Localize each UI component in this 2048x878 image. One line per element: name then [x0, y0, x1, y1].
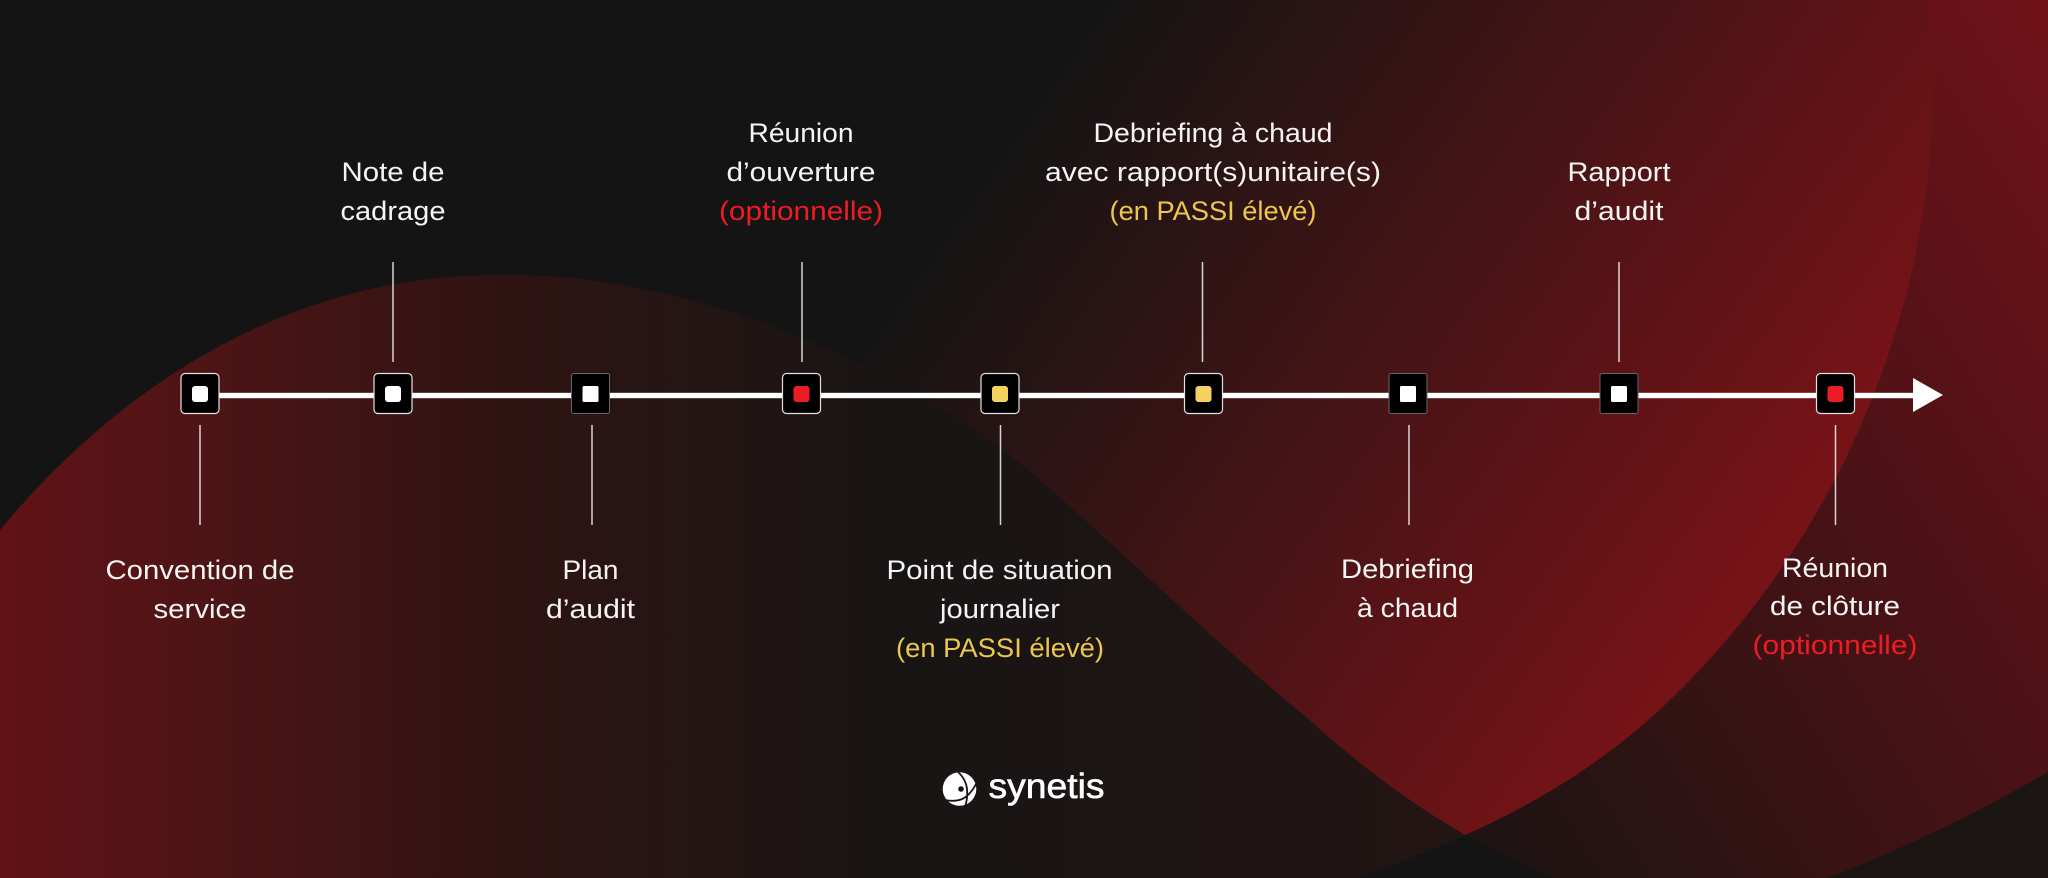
label: réunion d'ouverture [719, 118, 883, 226]
node: plan d'audit [572, 374, 610, 414]
label: plan d'audit [546, 555, 636, 624]
node: rapport d'audit [1600, 374, 1638, 414]
connector lines [200, 262, 1836, 525]
label: debriefing avec rapports: (en PASSI élevé) [1110, 196, 1316, 226]
node: debriefing à chaud [1389, 374, 1427, 414]
background shape: right red region [1356, 0, 2048, 878]
icon: synetis globe [943, 771, 976, 807]
label: debriefing à chaud: Debriefing [1341, 554, 1474, 584]
background triangle under the wave [0, 275, 1555, 878]
label: convention de service: Convention de [106, 555, 294, 585]
node: réunion d'ouverture [782, 374, 820, 414]
label: convention de service [106, 555, 294, 624]
node: convention de service [181, 374, 219, 414]
label: debriefing à chaud: à chaud [1357, 593, 1458, 623]
label: réunion d'ouverture: Réunion [748, 118, 854, 148]
label: point de situation journalier: Point de situation [886, 555, 1112, 585]
label: réunion de clôture [1752, 553, 1918, 660]
label: rapport d'audit [1568, 157, 1671, 226]
label: plan d'audit: Plan [562, 555, 618, 585]
label: debriefing avec rapports: Debriefing à chaud [1094, 118, 1332, 148]
node: debriefing avec rapports [1184, 374, 1222, 414]
label: point de situation journalier: (en PASSI élevé) [896, 633, 1104, 663]
background shape: left wave [0, 275, 1555, 878]
node: note de cadrage [374, 374, 412, 414]
label: rapport d'audit: Rapport [1568, 157, 1671, 187]
label: réunion d'ouverture: (optionnelle) [719, 196, 883, 226]
node: réunion de clôture [1816, 374, 1854, 414]
label: debriefing avec rapports [1045, 118, 1381, 226]
label: plan d'audit: d’audit [546, 594, 636, 624]
label: réunion de clôture: de clôture [1770, 591, 1900, 621]
label: convention de service: service [154, 594, 246, 624]
label: point de situation journalier: journalier [939, 594, 1060, 624]
label: debriefing avec rapports: avec rapport(s)unitaire(s) [1045, 157, 1381, 187]
label: note de cadrage [340, 157, 446, 226]
label: note de cadrage: Note de [342, 157, 444, 187]
label: réunion de clôture: Réunion [1782, 553, 1888, 583]
label: réunion d'ouverture: d’ouverture [726, 157, 876, 187]
timeline axis with arrow [200, 378, 1943, 412]
background corner: bottom right [1827, 772, 2048, 878]
label: debriefing à chaud [1341, 554, 1474, 623]
label: note de cadrage: cadrage [340, 196, 446, 226]
logo wordmark: synetis [988, 767, 1104, 806]
label: point de situation journalier [886, 555, 1112, 663]
logo: synetis [943, 767, 1104, 807]
label: rapport d'audit: d’audit [1574, 196, 1664, 226]
node: point de situation [981, 374, 1019, 414]
label: réunion de clôture: (optionnelle) [1752, 630, 1918, 660]
